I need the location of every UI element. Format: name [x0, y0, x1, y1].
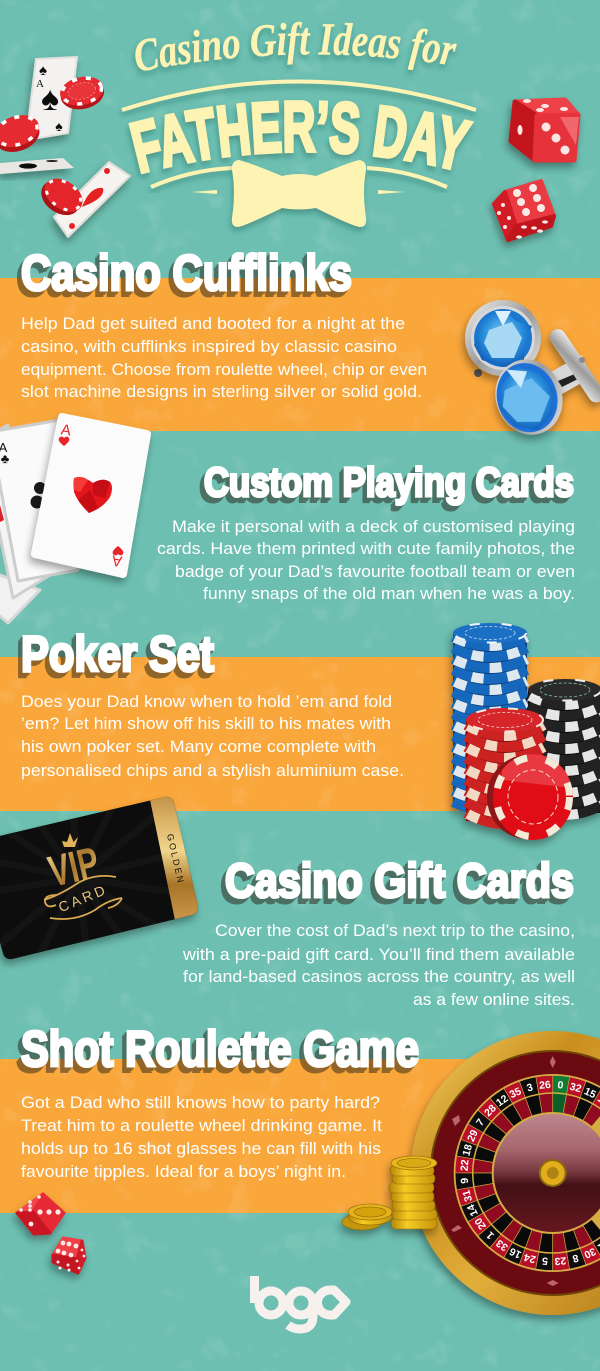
- flat card: [0, 158, 74, 174]
- lower die: [53, 1238, 85, 1273]
- body text: cards. Have them printed with cute family photos, the: [157, 539, 575, 558]
- section: poker set: [21, 626, 404, 780]
- front cufflink: [486, 351, 572, 443]
- CARD lettering: CARD: [56, 881, 110, 915]
- number ring: 16: [508, 1245, 523, 1261]
- coin stack: [389, 1156, 437, 1229]
- number ring: 18: [460, 1143, 475, 1157]
- red chip 3: [35, 171, 89, 223]
- number ring: 0: [557, 1079, 564, 1092]
- dark red track: [432, 1052, 600, 1294]
- number ring: 12: [494, 1093, 511, 1109]
- number ring: 29: [465, 1128, 481, 1144]
- number ring: 20: [472, 1215, 489, 1232]
- section: casino gift cards: [182, 855, 575, 1009]
- number ring: 22: [459, 1159, 472, 1172]
- body text: for land-based casinos across the country, as well: [183, 967, 575, 986]
- gold strip: [150, 797, 198, 920]
- section: custom playing cards: [157, 459, 575, 603]
- number ring: 3: [526, 1081, 534, 1095]
- body text: [21, 314, 427, 401]
- orange band: casino cufflinks: [0, 278, 600, 431]
- number ring: 15: [582, 1085, 598, 1101]
- number ring: [454, 1074, 600, 1272]
- red chip stack: [466, 708, 544, 824]
- small dashes: [191, 190, 405, 194]
- body text: ’em? Let him show off his skill to his mates with: [21, 714, 391, 733]
- number ring: 7: [474, 1117, 487, 1128]
- number ring: 1: [484, 1229, 497, 1242]
- cufflink bar: [545, 326, 600, 405]
- icon: small red die: [494, 181, 554, 240]
- number ring: 28: [482, 1102, 499, 1119]
- body text: personalised chips and a stylish aluminium case.: [21, 761, 404, 780]
- icon: bottom left red dice: [17, 1194, 85, 1273]
- crown: [62, 833, 78, 847]
- icon: large red die: [511, 99, 579, 160]
- gold outer ring: [411, 1031, 600, 1315]
- icon: fan of playing cards: ♣: [1, 451, 10, 466]
- black chip stack: [528, 679, 600, 815]
- body text: badge of your Dad’s favourite football team or even: [175, 562, 575, 581]
- body text: favourite tipples. Ideal for a boys’ night in.: [21, 1162, 346, 1181]
- body text: equipment. Choose from roulette wheel, chip or even: [21, 360, 427, 379]
- illustration: cards and chips top left: [0, 57, 130, 237]
- front red chip: [487, 754, 573, 840]
- title script line: Casino Gift Ideas for: [132, 22, 457, 76]
- body text: Help Dad get suited and booted for a night at the: [21, 314, 405, 333]
- body text: Got a Dad who still knows how to party hard?: [21, 1093, 380, 1112]
- father's day lettering: FATHER’S DAY: [126, 100, 474, 180]
- number ring: 9: [459, 1177, 471, 1184]
- orange band: shot roulette game: [0, 1059, 600, 1213]
- icon: VIP gift card: [0, 796, 200, 968]
- icon: roulette wheel: [411, 1031, 600, 1315]
- flat coin pile: [342, 1204, 392, 1230]
- orange band: poker set: [0, 657, 600, 811]
- front card: ace of hearts: [35, 417, 147, 574]
- body text: funny snaps of the old man when he was a boy.: [203, 584, 575, 603]
- number ring: 14: [465, 1202, 481, 1218]
- red chip 2: [0, 110, 45, 157]
- ace of spades card: ♠: [39, 62, 47, 79]
- lower banner arcs: [151, 168, 447, 187]
- icon: VIP gift card: GOLDEN: [165, 833, 186, 886]
- heading: Poker Set: [21, 626, 214, 682]
- bgo logo: [254, 1276, 346, 1329]
- body text: Treat him to a roulette wheel drinking game. It: [21, 1116, 382, 1135]
- front card: ace of hearts: A: [111, 551, 123, 570]
- body text: as a few online sites.: [413, 990, 575, 1009]
- heading: Shot Roulette Game: [21, 1021, 419, 1077]
- number ring: 31: [460, 1188, 475, 1203]
- ace of spades card: ♠: [41, 80, 59, 118]
- number ring: 5: [541, 1254, 548, 1267]
- heading: Casino Cufflinks: [21, 245, 352, 301]
- icon: cufflinks: [465, 300, 600, 443]
- red chip 1: [57, 73, 107, 113]
- number ring: 8: [571, 1251, 580, 1265]
- number ring: 26: [539, 1079, 552, 1092]
- sunburst rays: [0, 798, 196, 953]
- number ring: 35: [508, 1085, 523, 1101]
- body text: [157, 517, 575, 603]
- number ring: 23: [554, 1254, 567, 1267]
- faceted heart: [74, 477, 112, 513]
- ace of spades card: [26, 57, 77, 140]
- body text: with a pre-paid gift card. You’ll find them available: [182, 945, 575, 964]
- gold flourishes: [44, 876, 122, 919]
- ace of spades card: ♠: [55, 118, 63, 134]
- VIP lettering: VIP: [44, 838, 104, 897]
- number ring: 33: [494, 1237, 510, 1253]
- blue chip stack: [453, 623, 527, 811]
- ace of spades card: A: [36, 78, 44, 90]
- icon: gold coins: [342, 1156, 437, 1230]
- body text: holds up to 16 shot glasses he can fill with his: [21, 1139, 381, 1158]
- body text: casino, with cufflinks inspired by classic casino: [21, 337, 397, 356]
- cufflink stud: [474, 369, 482, 377]
- section: casino cufflinks: [21, 245, 427, 401]
- icon: poker chip stacks: [453, 623, 600, 840]
- body text: [21, 1093, 382, 1181]
- bow tie: [232, 160, 366, 227]
- body text: [182, 921, 575, 1009]
- number ring: 24: [523, 1251, 537, 1265]
- ace of hearts card: [54, 162, 130, 237]
- number ring: 32: [568, 1081, 583, 1095]
- body text: his own poker set. Many come complete with: [21, 737, 376, 756]
- centre cone: [493, 1113, 600, 1233]
- back cufflink: [465, 300, 541, 376]
- icon: fan of playing cards: [0, 417, 147, 623]
- upper die: [17, 1194, 64, 1234]
- title: [120, 22, 477, 233]
- hub: [539, 1159, 567, 1187]
- section: shot roulette game: [21, 1021, 419, 1181]
- body text: Does your Dad know when to hold ’em and fold: [21, 692, 392, 711]
- body text: [21, 692, 404, 780]
- body text: Cover the cost of Dad’s next trip to the casino,: [215, 921, 575, 940]
- body text: slot machine designs in sterling silver or solid gold.: [21, 382, 422, 401]
- body text: Make it personal with a deck of customised playing: [172, 517, 575, 536]
- number ring: 30: [582, 1245, 598, 1261]
- upper banner arc: [122, 82, 476, 110]
- front card: ace of hearts: A: [60, 421, 72, 440]
